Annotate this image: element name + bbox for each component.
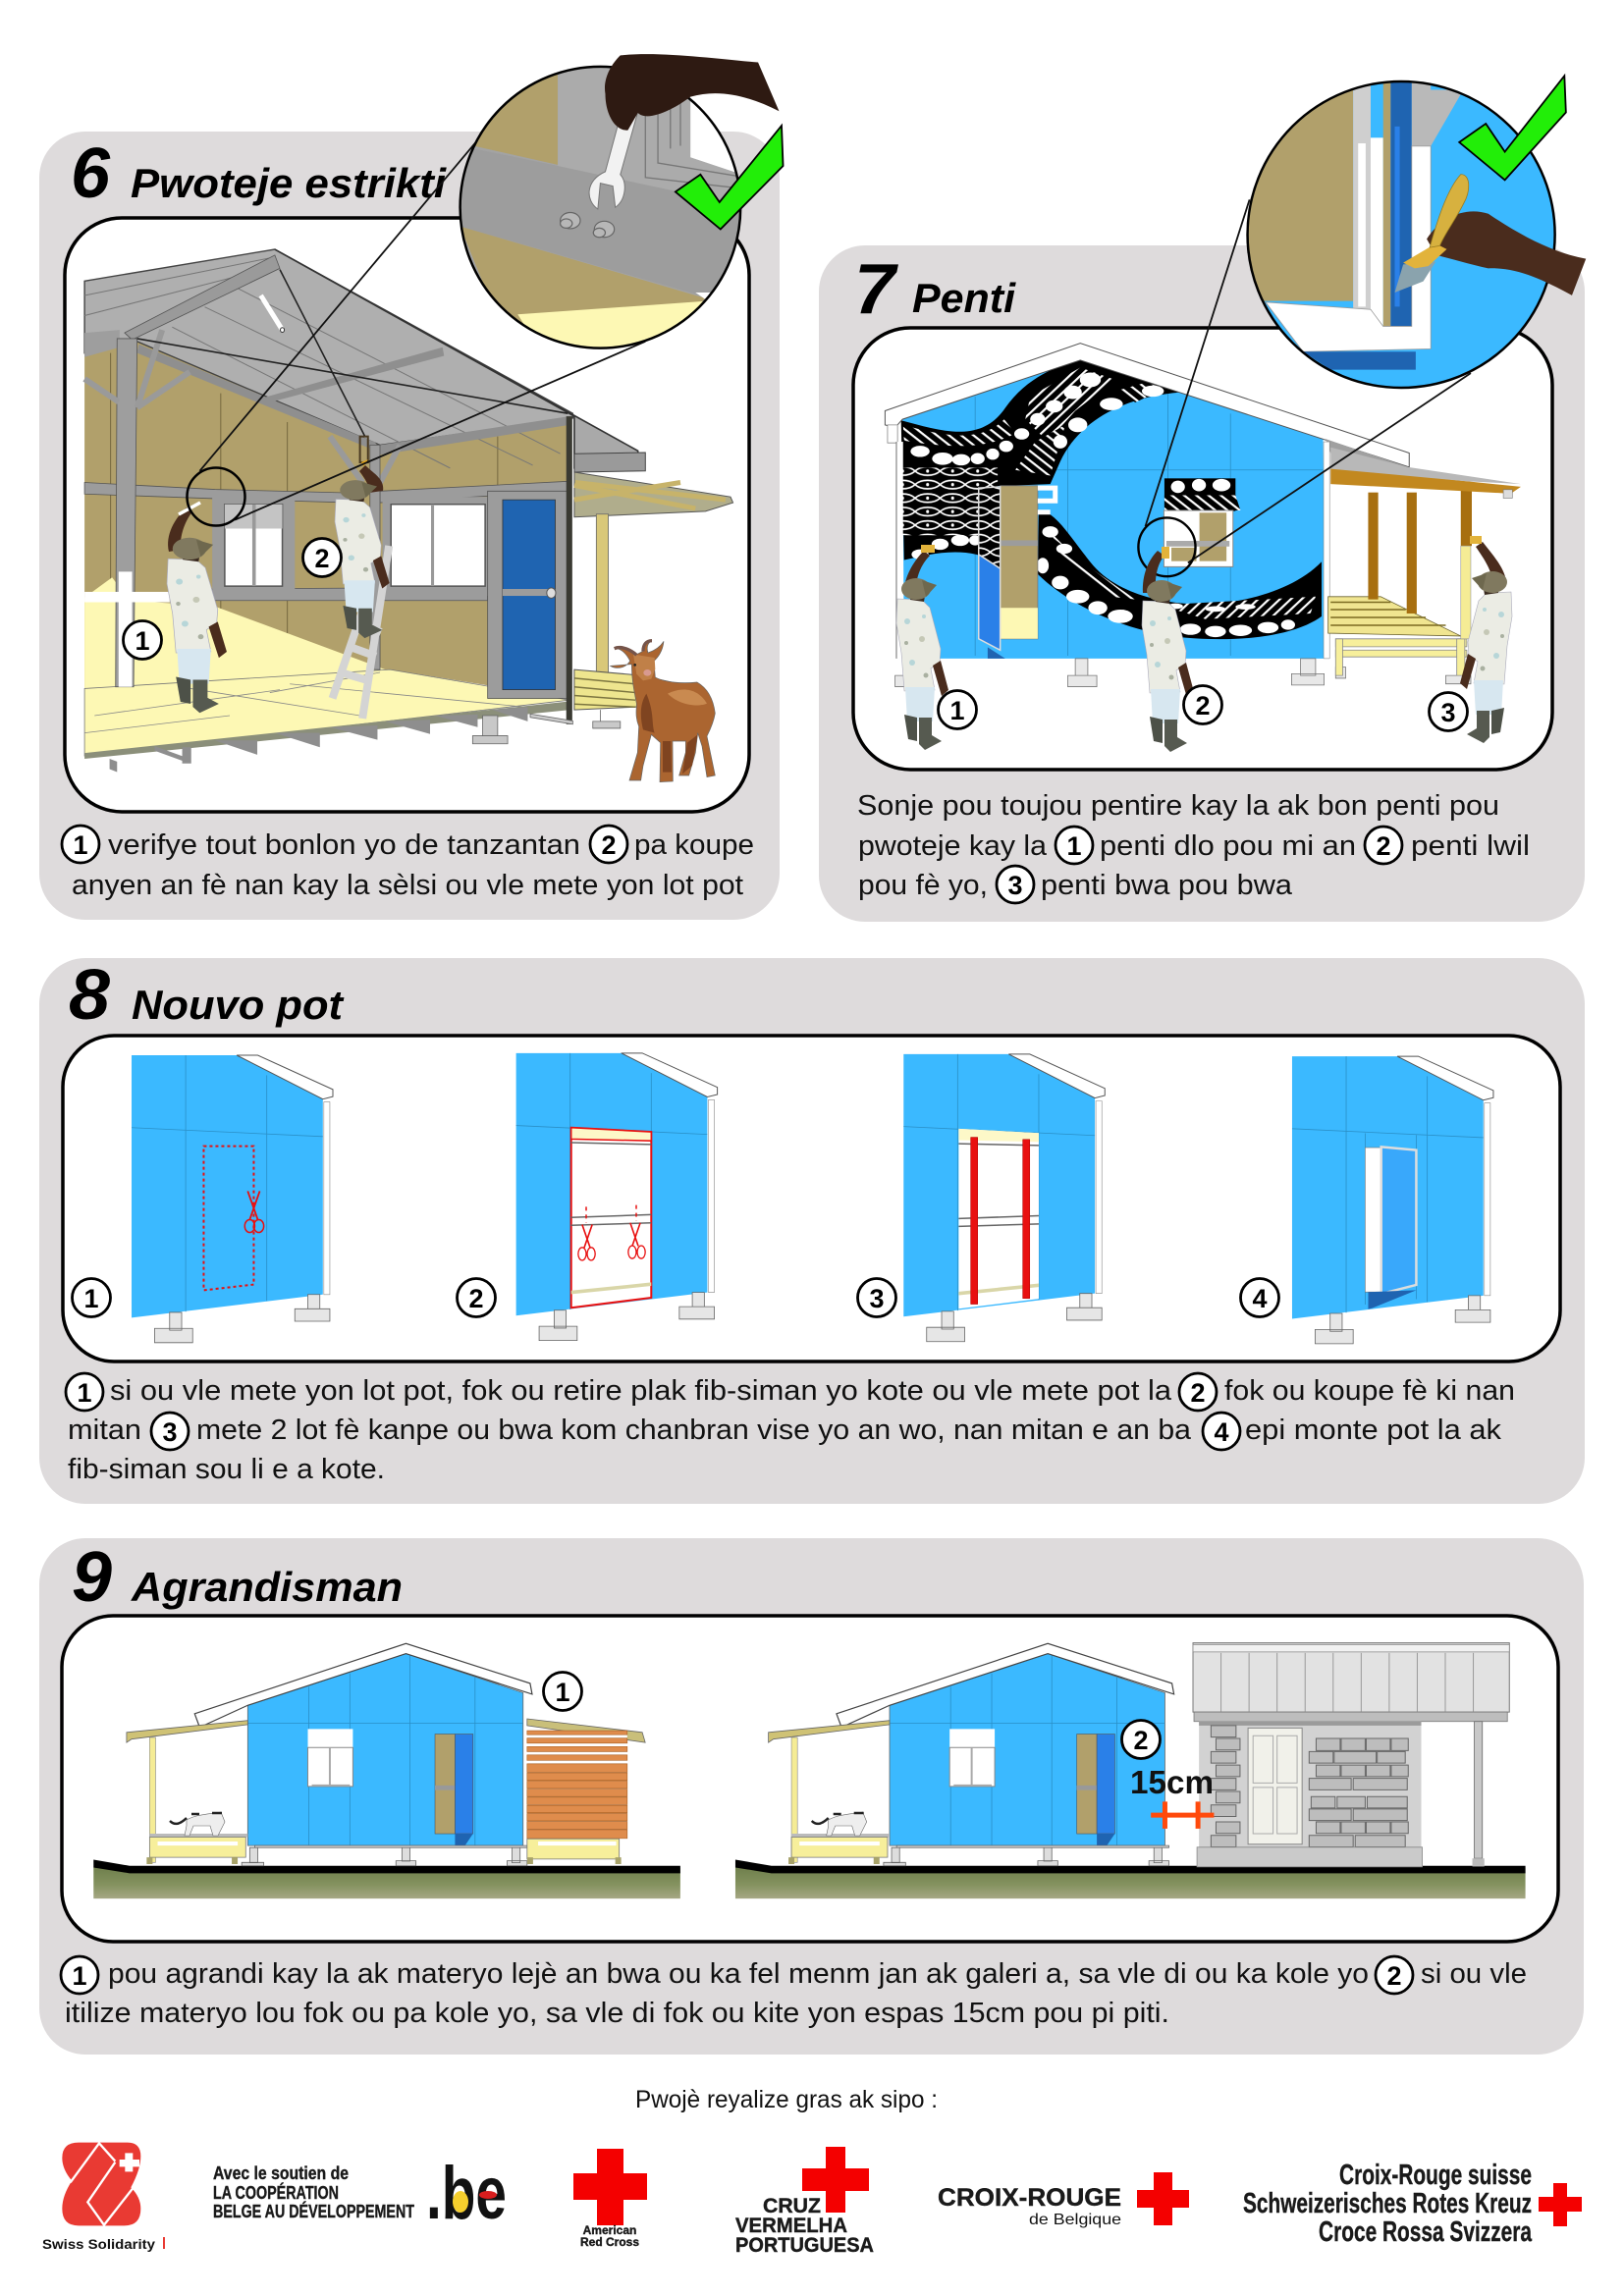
window	[1164, 478, 1235, 511]
text block: step 8: epi monte pot la ak	[1245, 1415, 1502, 1446]
panel: step 8 background	[39, 958, 1585, 1504]
logo: Swiss Solidarity	[42, 2143, 165, 2252]
illustration: wall 2 with opening	[516, 1053, 718, 1341]
red gap marker	[1151, 1801, 1214, 1829]
illustration: house with light wood extension	[93, 1643, 680, 1898]
panel: step 7 background	[819, 245, 1585, 922]
white box: step 7 illustration	[853, 328, 1552, 770]
numbered markers in illustrations: 3	[1440, 698, 1456, 727]
black decorative swirl upper	[901, 358, 1180, 562]
sponsors heading: Pwojè reyalize gras ak sipo :	[635, 2086, 938, 2113]
wall panels	[84, 342, 568, 698]
logo: Swiss Red Cross	[1243, 2160, 1582, 2248]
logo: Croix-Rouge de Belgique: CROIX-ROUGE	[938, 2184, 1121, 2212]
text block: step 6	[62, 826, 754, 901]
illustration: wall 4 with new door	[1292, 1056, 1493, 1344]
logo: Croix-Rouge de Belgique	[938, 2172, 1189, 2228]
logo: Belgian cooperation: Avec le soutien de	[213, 2163, 349, 2183]
logo: Cruz Vermelha Portuguesa: PORTUGUESA	[735, 2234, 874, 2257]
logo: American Red Cross: Red Cross	[580, 2235, 639, 2249]
illustration: house with heavy block building and 15cm gap	[735, 1643, 1526, 1898]
wrench	[589, 88, 643, 209]
illustration: wall 1 with cut marks	[132, 1055, 333, 1343]
heading: step 7: Penti	[912, 275, 1016, 321]
text block: step 6: verifye tout bonlon yo de tanzantan	[108, 829, 580, 861]
heading: step 9	[72, 1538, 403, 1617]
text block: step 7: 2	[1376, 831, 1391, 861]
check mark	[676, 126, 784, 230]
text block: step 7: penti bwa pou bwa	[1041, 870, 1293, 901]
foundation pad	[472, 716, 508, 744]
text block: step 7: penti dlo pou mi an	[1100, 830, 1356, 862]
sunlit wall patch	[84, 577, 390, 690]
text block: step 8: fib-siman sou li e a kote.	[68, 1454, 385, 1485]
text block: step 6: 1	[73, 830, 88, 860]
porch	[574, 472, 733, 517]
logo: Belgian cooperation: .be	[426, 2152, 507, 2235]
text block: step 8: mitan	[68, 1415, 141, 1446]
text block: step 8: 3	[162, 1417, 178, 1447]
painter 3	[1460, 536, 1512, 743]
text block: step 9: 1	[72, 1961, 87, 1991]
heading: step 9: Agrandisman	[131, 1564, 403, 1610]
logo: Belgian cooperation: LA COOPÉRATION	[213, 2182, 339, 2203]
cat on porch	[170, 1812, 225, 1836]
panel: step 9 background	[39, 1538, 1584, 2055]
text block: step 9: pou agrandi kay la ak materyo lejè an bwa ou ka fel menm jan ak galeri a, sa vle di ou ka kole yo	[108, 1958, 1369, 1990]
heading: step 8: Nouvo pot	[132, 982, 345, 1028]
heading: step 7	[854, 250, 1016, 329]
text block: step 8: mete 2 lot fè kanpe ou bwa kom chanbran vise yo an wo, nan mitan e an ba	[196, 1415, 1192, 1446]
roof trim	[885, 344, 1409, 467]
numbered markers in illustrations: 4	[1252, 1284, 1268, 1313]
painter 2	[1142, 547, 1194, 752]
numbered markers in illustrations: 2	[1133, 1726, 1149, 1755]
check mark	[1459, 76, 1566, 180]
text block: step 9: si ou vle	[1421, 1958, 1527, 1990]
logo: Belgian cooperation	[213, 2152, 507, 2235]
guide lines	[137, 270, 568, 437]
text block: step 8: si ou vle mete yon lot pot, fok ou retire plak fib-siman yo kote ou vle mete pot la	[110, 1375, 1172, 1407]
steel beams and column	[84, 483, 350, 503]
window left	[212, 497, 295, 598]
logo: Cruz Vermelha Portuguesa: CRUZ	[763, 2195, 821, 2217]
person 1 with wrench	[167, 503, 227, 713]
logo: Swiss Solidarity: Swiss Solidarity	[42, 2236, 155, 2252]
heading: step 6: 6	[71, 134, 111, 213]
cat on second porch	[812, 1812, 867, 1836]
text block: step 9: itilize materyo lou fok ou pa kole yo, sa vle di fok ou kite yon espas 15cm pou pi piti.	[65, 1998, 1169, 2029]
logo: American Red Cross: American	[583, 2223, 636, 2237]
window right	[383, 497, 488, 596]
text block: step 7	[857, 790, 1530, 903]
heading: step 7: 7	[854, 250, 898, 329]
heading: step 6	[71, 134, 447, 213]
panel: step 6 background	[39, 132, 780, 920]
bolts	[561, 213, 615, 238]
magnifier: step 6 bolts	[460, 54, 784, 350]
numbered markers in illustrations: 2	[468, 1284, 484, 1313]
label: 15cm: 15cm	[1130, 1764, 1214, 1800]
numbered markers in illustrations: 1	[555, 1678, 570, 1707]
text block: step 6: anyen an fè nan kay la sèlsi ou vle mete yon lot pot	[72, 870, 743, 901]
ladder	[333, 546, 389, 719]
hand	[605, 54, 779, 131]
hand	[1427, 211, 1586, 295]
numbered markers in illustrations: 2	[1195, 691, 1211, 721]
illustration: painted house step 7	[885, 199, 1521, 687]
roof underside	[84, 249, 572, 445]
text block: step 9: 2	[1386, 1961, 1402, 1991]
logo: Swiss Red Cross: Croce Rossa Svizzera	[1319, 2216, 1533, 2248]
text block: step 9	[61, 1956, 1527, 2029]
white box: step 8 illustration	[63, 1036, 1560, 1362]
numbered markers in illustrations: 1	[135, 626, 150, 656]
neighbouring block building	[1193, 1643, 1509, 1712]
text block: step 8: 2	[1190, 1378, 1206, 1408]
text block: step 8: 4	[1214, 1417, 1229, 1447]
floor joists	[110, 707, 527, 772]
text block: step 6: 2	[601, 830, 617, 860]
numbered markers in illustrations: 1	[83, 1284, 99, 1313]
text block: step 8	[66, 1373, 1515, 1485]
illustration: wall 3 with iron studs	[903, 1054, 1105, 1342]
text block: step 8: fok ou koupe fè ki nan	[1224, 1375, 1515, 1407]
heading: step 8	[69, 956, 345, 1035]
porch deck and wood	[1328, 597, 1461, 636]
illustration: house interior with structure	[84, 137, 733, 772]
white box: step 9 illustration	[62, 1616, 1558, 1942]
guide lines	[1146, 199, 1471, 562]
text block: step 7: Sonje pou toujou pentire kay la ak bon penti pou	[857, 790, 1499, 822]
numbered markers in illustrations: 1	[949, 696, 965, 725]
person 2 on ladder	[335, 465, 390, 638]
text block: step 7: pwoteje kay la	[858, 830, 1048, 862]
painter 1	[896, 545, 948, 750]
door	[1001, 486, 1038, 639]
piers	[242, 1845, 527, 1866]
heading: step 6: Pwoteje estrikti	[131, 160, 447, 206]
right wooden extension	[527, 1719, 645, 1742]
goat	[611, 641, 715, 782]
logo: Cruz Vermelha Portuguesa	[735, 2147, 874, 2257]
text block: step 7: 1	[1066, 831, 1082, 861]
numbered markers in illustrations: 2	[314, 544, 330, 573]
floor	[84, 669, 569, 756]
small detail circle step 6	[187, 467, 245, 526]
text block: step 7: 3	[1007, 871, 1023, 900]
text block: step 6: pa koupe	[634, 829, 754, 861]
house wall	[902, 357, 1326, 659]
magnifier: step 7 brush	[1246, 76, 1586, 388]
numbered markers in illustrations	[73, 538, 1467, 1759]
blue door	[488, 491, 568, 698]
text block: step 8: 1	[77, 1378, 92, 1408]
text block: step 7: penti lwil	[1411, 830, 1530, 862]
logo: American Red Cross	[573, 2149, 647, 2249]
logo: Swiss Red Cross: Croix-Rouge suisse	[1339, 2160, 1532, 2191]
logo: Belgian cooperation: BELGE AU DÉVELOPPEMENT	[213, 2201, 414, 2221]
left porch	[127, 1721, 247, 1742]
logo: Cruz Vermelha Portuguesa: VERMELHA	[735, 2215, 847, 2237]
black decorative swirl lower	[1038, 510, 1322, 639]
text block: step 7: pou fè yo,	[858, 870, 988, 901]
logo: Croix-Rouge de Belgique: de Belgique	[1029, 2212, 1121, 2228]
heading: step 9: 9	[72, 1538, 112, 1617]
white box: step 6 illustration	[65, 218, 749, 812]
piers	[895, 659, 1471, 687]
brush	[1394, 261, 1435, 293]
heading: step 8: 8	[69, 956, 110, 1035]
numbered markers in illustrations: 3	[869, 1284, 885, 1313]
